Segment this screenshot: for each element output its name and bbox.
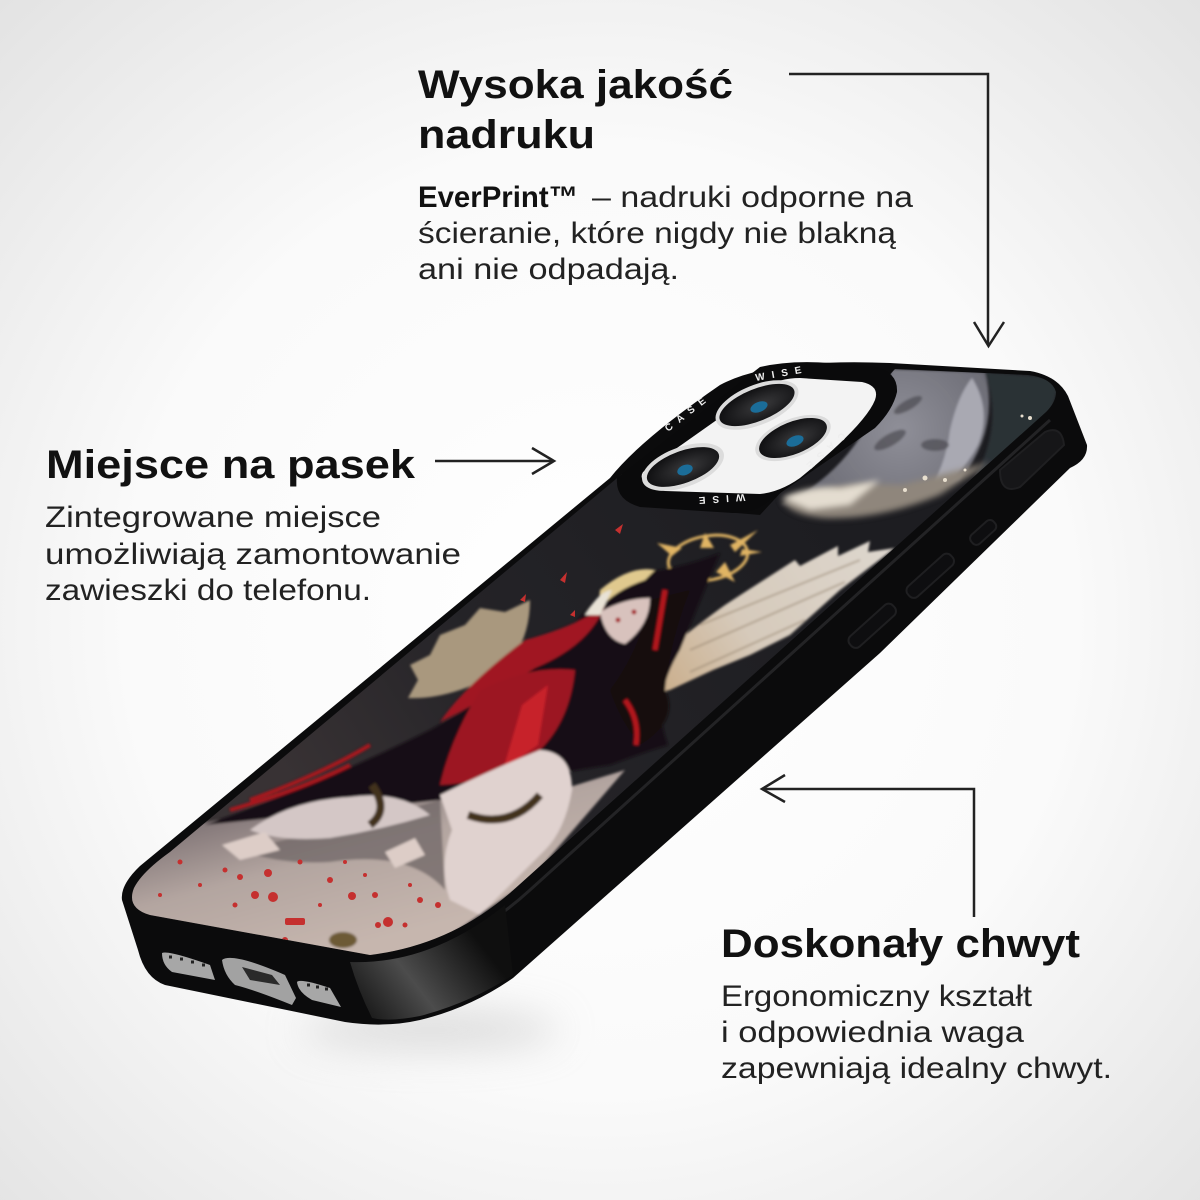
printed artwork [132,369,1056,955]
body text [721,980,1112,1085]
body text: – nadruki odporne na [592,181,913,214]
dark bands [370,785,540,825]
right wing [640,541,895,697]
glossy bottom corner [350,905,513,1020]
halo [657,529,762,587]
body text: i odpowiednia waga [721,1016,1024,1049]
body text: zapewniają idealny chwyt. [721,1052,1112,1085]
camera bumper [617,362,897,513]
heading: Miejsce na pasek [46,443,416,487]
body text [45,501,461,607]
flowing hair [205,553,720,825]
body text: umożliwiają zamontowanie [45,538,461,571]
side highlight [380,420,1050,975]
casetify brand text [663,364,847,506]
charging port [222,958,296,1005]
lens left [636,433,730,501]
red robe [440,669,575,785]
heading: Doskonały chwyt [721,922,1080,966]
body text [418,181,913,286]
lens right [749,405,837,471]
side buttons [846,430,1064,650]
hands [222,832,425,868]
body text: Ergonomiczny kształt [721,980,1033,1013]
gold trinket [329,932,357,948]
moon [780,369,989,511]
casetify brand text: WISE [755,364,809,384]
night sky corner [974,373,1056,476]
floor [132,769,626,955]
shadow under figure [240,800,445,890]
moon craters [871,393,949,454]
body text: ani nie odpadają. [418,253,679,286]
heading: nadruku [418,113,595,157]
callout: grip [721,922,1112,1085]
case body [122,362,1087,1025]
body text: zawieszki do telefonu. [45,574,371,607]
speaker right [297,981,341,1007]
callout: strap mount [45,443,461,607]
body text: ścieranie, które nigdy nie blakną [418,217,896,250]
clouds [782,462,990,518]
arrow: to strap mount [435,448,554,474]
callout: print quality [418,63,913,286]
figure pale shapes [440,750,572,915]
casetify brand text: WISE [691,491,746,506]
arrow: to case side [762,775,974,917]
flower crown [598,569,655,610]
casetify brand text: CASE [663,391,714,434]
sparkle dots [903,414,1032,492]
body text: Zintegrowane miejsce [45,501,381,534]
heading [418,63,733,157]
phone case illustration [100,350,1100,1025]
lens top [709,370,805,440]
left wing [408,600,530,698]
red petals [158,524,623,943]
face [600,598,650,644]
body text: EverPrint™ [418,181,578,214]
camera island [617,362,897,513]
phone shadow [300,1010,560,1050]
casetify brand text: CASE [799,430,847,475]
heading: Wysoka jakość [418,63,733,107]
arrow: to print surface [789,74,1004,346]
camera glass [642,378,876,494]
speaker left [162,952,215,980]
